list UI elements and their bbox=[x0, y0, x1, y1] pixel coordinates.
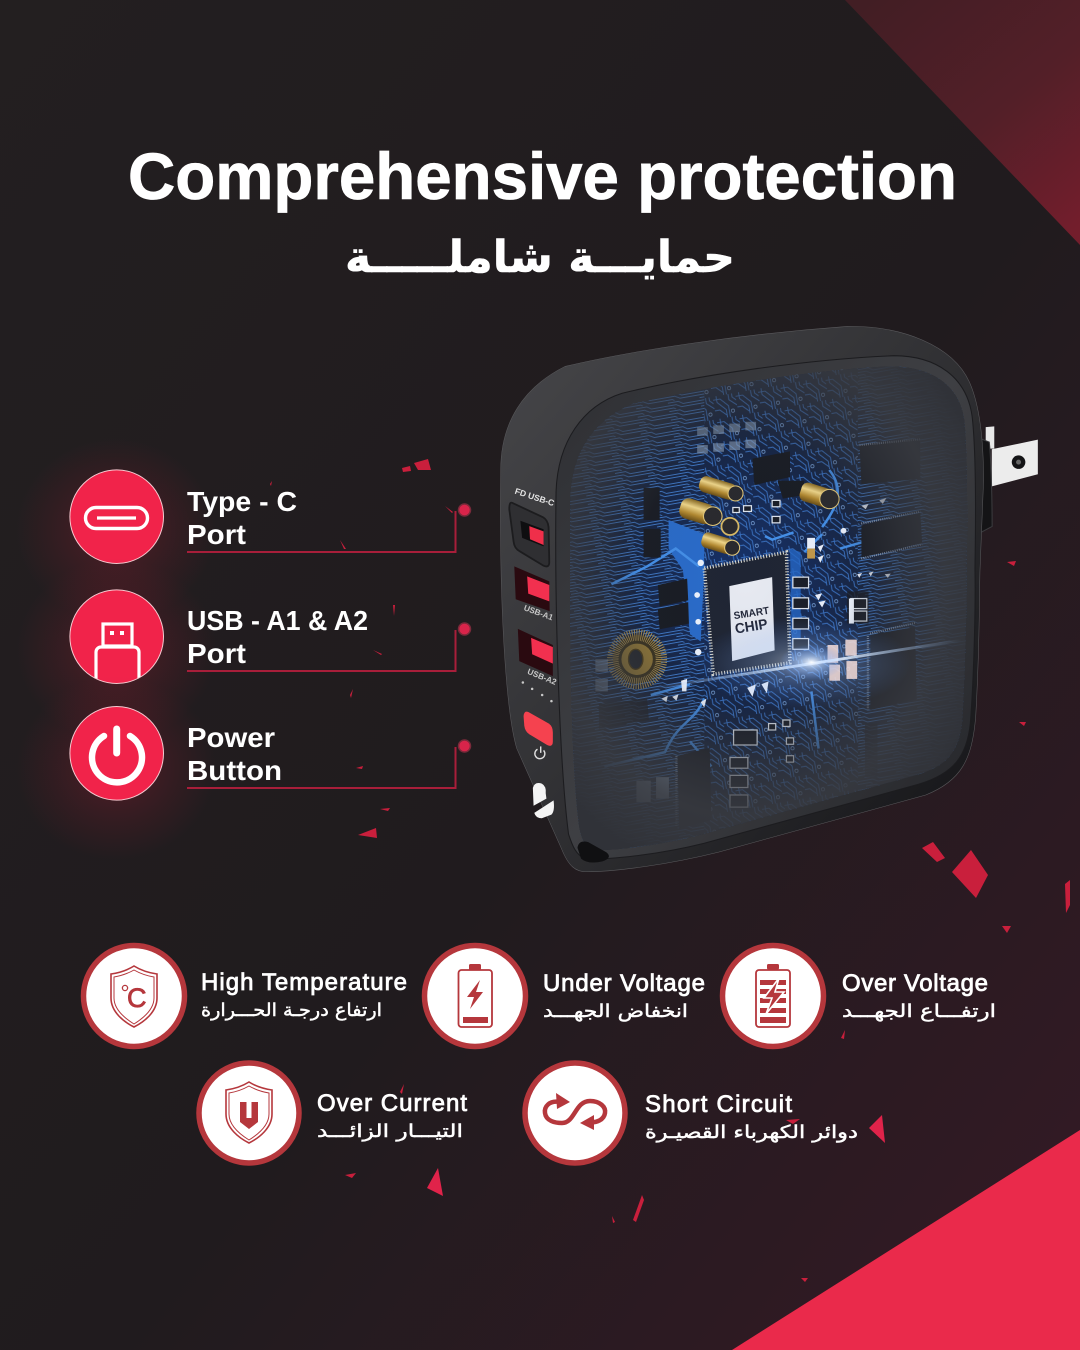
feature: Type-C port bbox=[16, 438, 470, 622]
label: Short Circuit: Short Circuit bbox=[645, 1091, 792, 1118]
USB-C port: FD USB-C bbox=[514, 486, 556, 508]
label: Under Voltage bbox=[543, 970, 705, 1022]
lanyard hole bbox=[577, 842, 609, 863]
label: Under Voltage: انخفاض الجهـــد bbox=[543, 1001, 688, 1022]
arabic title: حمايـــة شاملـــــة bbox=[345, 232, 735, 283]
glass veil bbox=[570, 366, 968, 850]
label: USB A1 and A2 Port bbox=[187, 605, 368, 669]
label: Short Circuit: دوائر الكهرباء القصيـرة bbox=[645, 1122, 858, 1143]
USB-A2 port: USB-A2 bbox=[526, 667, 558, 687]
dark ICs bbox=[599, 440, 922, 829]
icon: U shield bbox=[199, 1063, 299, 1163]
white highlight triangles bbox=[661, 498, 891, 707]
callout line bbox=[187, 623, 470, 671]
label: Power Button: Power bbox=[187, 722, 275, 753]
light flare bbox=[658, 621, 956, 704]
main smart chip: CHIP bbox=[734, 617, 769, 638]
icon glow bbox=[16, 558, 216, 742]
circuit board bbox=[570, 366, 968, 850]
label: Power Button: Button bbox=[187, 755, 282, 786]
protection: Under Voltage bbox=[424, 946, 705, 1046]
main smart chip: SMART bbox=[733, 606, 771, 622]
trace regions bbox=[570, 390, 704, 849]
label: USB A1 and A2 Port: USB - A1 & A2 bbox=[187, 605, 368, 636]
label: Over Voltage: Over Voltage bbox=[842, 970, 988, 997]
label: Over Current: Over Current bbox=[317, 1090, 467, 1117]
main smart chip bbox=[704, 552, 790, 674]
protection: Over Voltage bbox=[722, 946, 996, 1046]
plug prongs bbox=[978, 426, 1038, 533]
IC pins bbox=[676, 439, 922, 827]
scattered red shards bbox=[270, 459, 1070, 1282]
label: Short Circuit bbox=[645, 1091, 858, 1143]
feature: USB ports bbox=[34, 579, 472, 717]
solid blue board areas bbox=[669, 520, 704, 641]
feature: power button bbox=[16, 676, 470, 860]
gold accent bbox=[807, 549, 815, 559]
USB-C port bbox=[509, 486, 556, 566]
icon: power bbox=[70, 706, 164, 800]
label: Under Voltage: Under Voltage bbox=[543, 970, 705, 997]
title: Comprehensive protection bbox=[128, 139, 957, 213]
label: Type-C Port bbox=[187, 486, 297, 550]
label: High Temperature: ارتفاع درجـة الحـــرارة bbox=[201, 1000, 382, 1021]
icon: low battery bbox=[424, 946, 526, 1046]
protection: Over Current bbox=[199, 1063, 467, 1163]
gold capacitors bbox=[677, 475, 841, 557]
icon glow bbox=[16, 676, 216, 860]
callout line bbox=[187, 504, 470, 552]
icon: USB port bbox=[70, 590, 164, 692]
label: Over Current: التيـــار الزائـــد bbox=[317, 1121, 463, 1142]
red power button bbox=[524, 712, 553, 746]
icon: looping arrows bbox=[525, 1063, 625, 1163]
device: charger with visible circuit board bbox=[500, 326, 1038, 872]
bottom right red wedge bbox=[732, 1130, 1080, 1350]
label: Over Voltage bbox=[842, 970, 996, 1022]
indicator dots bbox=[522, 681, 553, 702]
front glass face bbox=[554, 352, 979, 863]
label: Over Voltage: ارتفـــاع الجهـــد bbox=[842, 1001, 996, 1022]
icon: over-charged battery bbox=[722, 946, 824, 1046]
side panel with ports bbox=[509, 486, 558, 818]
icon: thermal shield: C bbox=[127, 983, 146, 1013]
icon glow bbox=[16, 438, 216, 622]
callout line bbox=[187, 740, 470, 788]
label: USB A1 and A2 Port: Port bbox=[187, 638, 246, 669]
icon: thermal shield bbox=[84, 946, 184, 1046]
protection: Short Circuit bbox=[525, 1063, 858, 1163]
charger body bbox=[500, 326, 984, 872]
label: High Temperature bbox=[201, 969, 407, 1021]
label: Type-C Port: Type - C bbox=[187, 486, 297, 517]
power glyph bbox=[535, 746, 545, 759]
top right red wedge bbox=[845, 0, 1080, 245]
USB-A2 port bbox=[518, 629, 558, 687]
USB-A1 port: USB-A1 bbox=[523, 603, 555, 622]
small components bbox=[730, 500, 867, 807]
label: Type-C Port: Port bbox=[187, 519, 246, 550]
label: Over Current bbox=[317, 1090, 467, 1142]
protection: High Temperature bbox=[84, 946, 407, 1046]
label: Power Button bbox=[187, 722, 282, 786]
brand logo bbox=[533, 783, 554, 818]
label: High Temperature: High Temperature bbox=[201, 969, 407, 996]
icon: Type-C port bbox=[70, 470, 164, 564]
toroid coil bbox=[613, 635, 661, 684]
USB-A1 port bbox=[514, 566, 555, 622]
